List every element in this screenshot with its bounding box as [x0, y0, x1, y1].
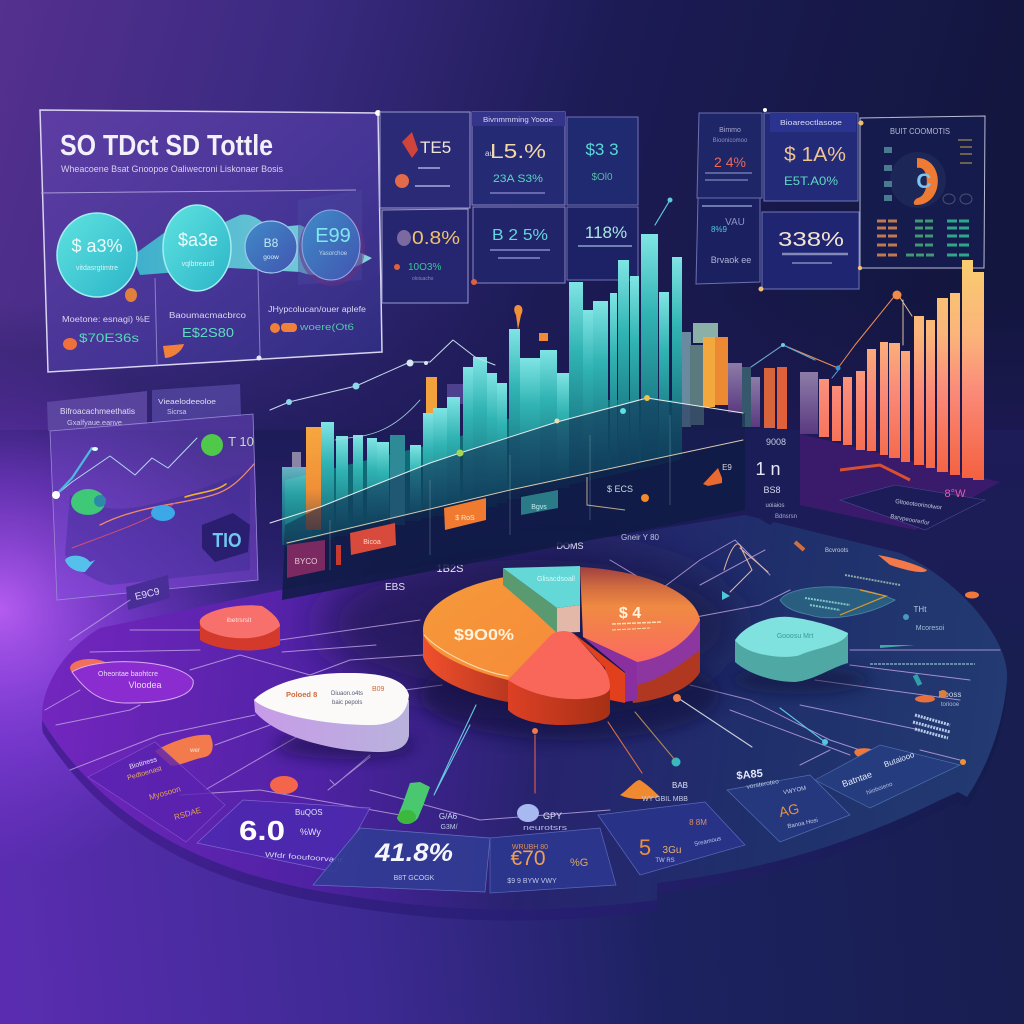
- purple base shadow: [792, 432, 1000, 530]
- KPI card top left: [380, 112, 470, 208]
- teal slice: Glisacdsoall: [537, 576, 575, 583]
- metric circle 2: vqlbtreardl: [182, 261, 215, 268]
- orange triangle marker: [620, 780, 660, 799]
- KPI card top middle: [472, 112, 565, 205]
- stat block 3: JHypcolucan/ouer aplefe: [268, 305, 367, 314]
- hexagon value: TIO: [212, 530, 242, 552]
- KPI card lower left: 10O3%: [408, 262, 441, 273]
- lavender marker: [517, 804, 568, 832]
- KPI card top middle: 23A S3%: [493, 173, 543, 185]
- marker orange drop: [673, 694, 681, 702]
- area peak behind circles: [132, 214, 372, 275]
- background wall: [0, 0, 1024, 440]
- metric circle 2: [163, 205, 231, 291]
- glass card top right: [780, 587, 895, 618]
- purple tag: [287, 540, 325, 578]
- green gauge top: T 10: [228, 434, 254, 449]
- orange tag: $ RoS: [455, 515, 475, 522]
- lower right label panel: [745, 428, 800, 525]
- metric circle 1: $ a3%: [71, 236, 123, 256]
- base data card: [840, 465, 985, 530]
- connector node peak: [668, 198, 672, 202]
- lower right label panel: Bdnsrsn: [775, 514, 797, 520]
- panels: right KPI grid: [696, 108, 985, 292]
- stat block 2: [163, 311, 247, 358]
- text: label top of disc: EBS: [385, 582, 405, 593]
- KPI column left top: [697, 113, 762, 198]
- text: label top of disc: DOMS: [556, 541, 584, 551]
- blue marker: [151, 505, 175, 521]
- KPI card top right: $3 3: [585, 140, 619, 159]
- card: amber NG stat: [727, 775, 850, 842]
- green gauge top: [201, 434, 254, 456]
- stat block 2: E$2S80: [182, 325, 234, 340]
- card: 53 stat: 5: [639, 835, 651, 860]
- green gauge left: [71, 489, 106, 515]
- orange tag: [444, 498, 486, 530]
- node sky: [781, 343, 785, 347]
- red tag: Bicoa: [363, 539, 381, 546]
- text: small caption by pill: G/A6: [439, 812, 458, 821]
- KPI column mid top: E5T.A0%: [784, 174, 838, 188]
- card: table lower right: [815, 745, 960, 808]
- stat block 1: [62, 288, 150, 350]
- peak marker lines: [724, 544, 768, 592]
- table: right text: [939, 690, 961, 708]
- lower right label panel: 9008: [766, 437, 786, 447]
- gauge panel: C: [916, 170, 932, 193]
- central shade on disc: [320, 545, 740, 705]
- stat block 3: [268, 305, 367, 333]
- blob: purple callout: Oheontae baohtcre: [98, 671, 158, 678]
- metric circle 4: E99: [315, 225, 351, 247]
- glass overlay lower: [282, 440, 745, 600]
- orange flag marker: [703, 463, 732, 486]
- glass grid lines: [330, 415, 670, 570]
- panel nodes: [758, 108, 864, 292]
- stat block 1: $70E36s: [79, 331, 139, 345]
- text: label top of disc: Gneir Y 80: [621, 533, 660, 542]
- KPI column left bottom: [696, 198, 760, 284]
- stat block 1: Moetone: esnagi) %E: [62, 314, 150, 324]
- base data card: Bsrvpeoorerfor: [890, 514, 930, 527]
- white callout label: Poloed 8: [286, 690, 317, 699]
- KPI card lower middle: B 2 5%: [492, 227, 548, 244]
- card: 670 stat: $9 9 BYW VWY: [507, 878, 557, 885]
- lower right label panel: uoiaios: [765, 503, 785, 509]
- KPI column left bottom: VAU: [725, 217, 745, 228]
- KPI card top left: TE5: [420, 138, 451, 157]
- start node: [52, 491, 60, 499]
- KPI card lower left: [382, 209, 468, 303]
- gauge panel: BUIT COOMOTIS: [890, 127, 950, 136]
- right block upper text: [870, 605, 975, 685]
- disc edge: [42, 526, 1007, 921]
- card: 670 stat: WRUBH 80: [512, 844, 548, 851]
- faded purple block: [447, 384, 467, 404]
- orange slice: [423, 577, 558, 702]
- blob: orange tag: [155, 735, 213, 766]
- lavender marker: neurotsrs: [523, 825, 568, 832]
- panel header left: [47, 391, 147, 431]
- node orange: [960, 759, 966, 765]
- card: 6.0 stat: Wfdr fooufoorvanr: [265, 852, 344, 864]
- panel node: [375, 110, 381, 116]
- text: small caption by pill: G3M/: [440, 824, 458, 831]
- card: table lower right: hiioboieno: [866, 781, 894, 797]
- panel header right: Sicrsa: [167, 409, 187, 416]
- right block upper text: THt: [914, 605, 927, 614]
- KPI column mid top: Bioareoctlasooe: [780, 118, 842, 127]
- KPI card top middle: Bivnmmming Yoooe: [483, 117, 553, 124]
- card: 6.0 stat: %Wy: [300, 827, 321, 837]
- KPI column left top: Bimmo: [719, 127, 741, 134]
- card: 670 stat: [490, 828, 616, 893]
- front coral slice: [508, 631, 610, 725]
- connector line to peak: [655, 200, 670, 225]
- wall horizon shade: [0, 300, 1024, 440]
- glass overlay upper: [282, 398, 745, 600]
- table: right text: toriooe: [941, 702, 960, 708]
- card: 6.0 stat: [197, 800, 370, 872]
- upper trend nodes: [286, 360, 428, 405]
- text: small caption by pill: [439, 812, 458, 831]
- card: left stacked text: Biotiness: [129, 756, 158, 771]
- peak node: [892, 290, 902, 300]
- blob: white callout: baic pepols: [332, 700, 362, 706]
- orange marker lower right: [853, 746, 887, 764]
- node cyan: [822, 739, 828, 745]
- text: pricing caption: WY GBIL MBB: [642, 796, 688, 803]
- card: left stacked text: Pedtoenast: [127, 765, 163, 782]
- KPI column left bottom: Brvaok ee: [711, 255, 751, 265]
- KPI card lower left: oloiuacho: [412, 276, 434, 282]
- pointer lines from pie: [434, 698, 825, 795]
- teal tag: Bgvs: [531, 504, 547, 511]
- lavender marker: GPY: [543, 811, 562, 821]
- circular data platform: [42, 515, 1007, 910]
- card: 670 stat: €70: [510, 847, 546, 870]
- right slice: $ 4: [619, 605, 641, 622]
- gauge panel: [860, 116, 985, 268]
- text: pricing caption: [642, 781, 688, 803]
- orange drop marker: [514, 305, 522, 330]
- KPI column mid bottom: [762, 212, 859, 289]
- grey marker block: [292, 452, 301, 467]
- value label in glass: $ ECS: [607, 484, 633, 494]
- hexagon value: [202, 513, 250, 562]
- right slice: [573, 567, 700, 703]
- table: right block: [913, 715, 950, 738]
- stat block 3: woere(Ot6: [299, 322, 354, 332]
- coral trend blue segment: [751, 345, 840, 378]
- KPI card lower middle: [473, 207, 565, 283]
- metric circle 2: $a3e: [178, 230, 218, 250]
- text: label top of disc: 1B2S: [437, 563, 463, 575]
- blob: teal callout: [730, 617, 870, 694]
- line end marker: [92, 447, 98, 451]
- connector node red: [471, 279, 477, 285]
- KPI card top middle: L5.%: [490, 141, 546, 163]
- coral trend peak: [897, 293, 912, 345]
- floor glow: [0, 340, 270, 880]
- card: amber NG stat: Banoa Hosi: [787, 818, 819, 830]
- orange marker right: [915, 696, 935, 702]
- card: left stacked text: RSDAE: [173, 806, 202, 822]
- KPI column mid top: [764, 113, 858, 201]
- green pill marker: [397, 782, 430, 824]
- panel: summary dashboard: [40, 110, 382, 372]
- KPI column mid bottom: 338%: [778, 229, 844, 251]
- subtitle: Wheacoene Bsat Gnoopoe Oaliwecroni Liskonaer Bosis: [61, 164, 283, 175]
- KPI card top right: $Ol0: [591, 172, 613, 183]
- trend markers: [456, 395, 650, 502]
- panel header right: [152, 384, 241, 423]
- blob: purple callout: Vloodea: [128, 680, 162, 690]
- trend line white: [270, 398, 743, 523]
- metric circle 3: goow: [263, 254, 279, 261]
- mid trend line: [335, 400, 420, 440]
- right block upper text: Mcoresoi: [916, 625, 945, 632]
- orange pill marker: [878, 555, 927, 572]
- card: 53 stat: [598, 802, 745, 875]
- KPI card lower right: [567, 207, 638, 280]
- text: bold caption: $A85: [736, 768, 763, 782]
- amber front bar: [306, 427, 321, 530]
- panel header left: Gxalfyaue.eanve: [67, 420, 122, 427]
- value label in glass: [587, 477, 633, 510]
- trend line lower: [287, 440, 743, 543]
- marker orange pie pointers: [532, 728, 538, 734]
- text: pricing caption: BAB: [672, 781, 688, 790]
- panel header left: Bifroacachmeethatis: [60, 407, 135, 416]
- card: 6.0 stat: 6.0: [239, 815, 285, 846]
- card: 41.8% stat: [313, 828, 490, 892]
- card: 53 stat: Sreamous: [694, 836, 722, 848]
- glass chart panel: [50, 414, 258, 600]
- panels: centre KPI grid: [380, 112, 672, 303]
- card: amber NG stat: AG: [777, 800, 801, 820]
- blob: red marker: [270, 776, 298, 794]
- text: bold caption: [736, 768, 780, 791]
- card: 53 stat: 3Gu: [663, 845, 681, 856]
- KPI column left bottom: 8%9: [711, 225, 728, 234]
- purple tag: BYCO: [295, 557, 317, 566]
- metric circle 1: vitdasrgtimtre: [76, 265, 118, 272]
- teal marker: [722, 591, 730, 600]
- lower-left line chart panel: [47, 384, 258, 610]
- panel node lower: [256, 356, 262, 360]
- node teal: [672, 758, 680, 766]
- small red bar: [336, 545, 341, 565]
- card: 41.8% stat: 41.8%: [374, 839, 453, 867]
- pie chart: [420, 566, 720, 740]
- panel header right: Vieaelodeeoloe: [158, 399, 216, 406]
- card: left stacked text: Myosoon: [148, 784, 182, 802]
- KPI card lower left: 0.8%: [412, 228, 460, 248]
- top right data strip: [795, 542, 900, 615]
- card: 41.8% stat: B8T GCOGK: [394, 875, 435, 882]
- card: 53 stat: TW RS: [655, 858, 675, 864]
- text: bold caption: vorsteroteo: [746, 778, 780, 791]
- section divider: [41, 190, 356, 193]
- bar chart: main teal: [270, 234, 787, 600]
- card: 670 stat: %G: [570, 857, 588, 869]
- KPI column left top: Bioonicomoo: [713, 138, 748, 144]
- card: 6.0 stat: BuQOS: [295, 808, 323, 817]
- lower right label panel: BS8: [763, 485, 781, 495]
- bar chart: coral: [751, 260, 1000, 530]
- back bars fill: [285, 400, 680, 548]
- value tag: [126, 575, 170, 610]
- right back cluster: [682, 323, 787, 429]
- blob: orange tag: wer: [189, 748, 200, 754]
- dark chart backdrop: [65, 470, 250, 585]
- KPI card top right: [567, 117, 638, 205]
- metric circle 3: [245, 221, 297, 273]
- background floor: [0, 430, 1024, 1024]
- teal slice: [503, 566, 580, 633]
- slate bar: [390, 435, 405, 525]
- coral bars: [800, 372, 818, 434]
- title: SO TDct SD Tottle: [60, 130, 273, 162]
- blob: teal callout: Gooosu Mrt: [777, 633, 813, 640]
- blob: red callout: [200, 605, 280, 650]
- coral trend line: [751, 293, 897, 368]
- blob: purple callout: [70, 659, 193, 703]
- card: left stacked text: [88, 742, 225, 842]
- card: 53 stat: 8 8M: [689, 818, 707, 827]
- metric circle 4: Yasorchoe: [319, 251, 348, 257]
- metric circle 1: [57, 213, 137, 297]
- card: amber NG stat: VWYOM: [783, 786, 807, 796]
- red tag: [350, 523, 396, 555]
- stat block 2: Baoumacmacbrco: [169, 311, 247, 320]
- node blue: [836, 366, 840, 370]
- upper trend line: [270, 340, 495, 410]
- blob: red callout: ibetrsrsit: [227, 617, 251, 624]
- line series: [56, 438, 254, 548]
- blob: white callout: B09: [372, 686, 385, 693]
- back amber bar: [426, 377, 437, 413]
- metric circle 4: [298, 190, 365, 286]
- KPI card lower right: 118%: [585, 223, 627, 242]
- teal bars: [282, 234, 682, 545]
- orange small marker: [965, 592, 979, 598]
- floor top shade: [0, 430, 1024, 660]
- blue hand marker: [65, 556, 95, 572]
- card: table lower right: Butaiooo: [883, 750, 916, 769]
- table: right text: Rooss: [939, 690, 961, 699]
- top right data strip: Bcvroots: [825, 548, 848, 554]
- back amber square: [539, 333, 548, 341]
- blob: white callout: Diuaon.o4ts: [331, 691, 363, 697]
- orange flag marker: E9: [722, 463, 732, 472]
- blob: white callout: [254, 673, 415, 759]
- text: label top of disc: [385, 533, 660, 593]
- KPI card top middle: au: [485, 149, 494, 158]
- base data card: 8°W: [945, 488, 966, 500]
- teal tag: [521, 490, 558, 515]
- KPI column mid top: $ 1A%: [784, 144, 846, 166]
- metric circle 3: B8: [264, 236, 279, 250]
- base data card: Gltoeotoorinolwor: [895, 499, 942, 512]
- value tag: E9C9: [134, 586, 161, 603]
- KPI column left top: 2 4%: [714, 154, 746, 170]
- card: table lower right: Batntae: [841, 769, 873, 789]
- orange slice: $9O0%: [454, 627, 514, 644]
- disc connector lines: [45, 540, 1000, 820]
- lower right label panel: 1 n: [755, 459, 781, 479]
